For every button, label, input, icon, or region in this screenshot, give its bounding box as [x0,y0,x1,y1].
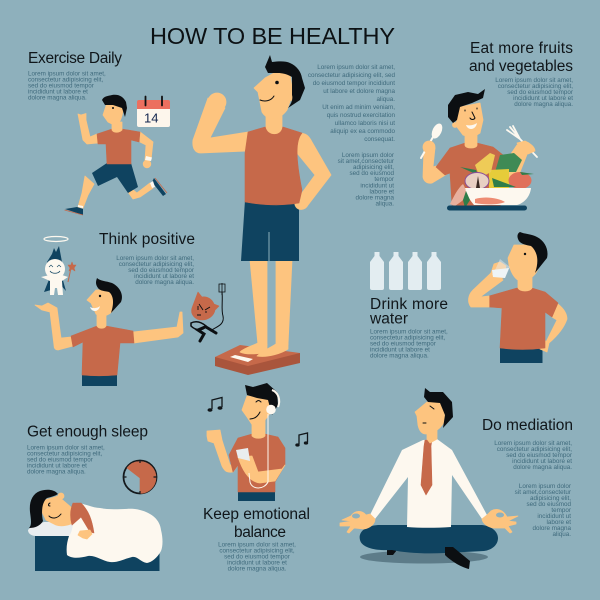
title: HOW TO BE HEALTHY [150,23,395,49]
devil icon [191,283,225,341]
text block: think positive: Lorem ipsum dolor sit amet, [116,255,194,262]
text block: central upper: aliquip ex ea commodo [330,128,395,135]
text block: central upper: ullamco laboris nisi ut [335,120,395,127]
text block: emotional: Lorem ipsum dolor sit amet, [218,542,296,548]
bathroom scale [215,345,300,375]
text block: eat: incididunt ut labore et [513,95,573,102]
music listening figure [207,383,285,501]
text block: mediation upper: dolore magna aliqua. [513,464,572,471]
heading: and vegetables: and vegetables [469,58,573,75]
heading: think positive: Think positive [99,231,195,248]
text block: mediation lower: sed do eiusmod [527,501,571,508]
heading: keep emotional: Keep emotional [203,506,310,523]
hand left [340,511,375,533]
heading: exercise daily: Exercise Daily [28,50,122,67]
text block: central upper: ut labore et dolore magna [323,88,395,95]
heading: eat more fruits: Eat more fruits [470,40,573,57]
panel: think positive [35,231,225,386]
text block: mediation upper: consectetur adipisicing elit, [497,446,572,453]
runner figure [64,95,167,215]
text block: eat: consectetur adipisicing elit, [498,83,573,90]
panel: do mediation [340,388,573,569]
heading: drink more: Drink more [370,296,448,313]
text block: eat: Lorem ipsum dolor sit amet, [495,77,573,84]
text block: mediation lower: adipisicing elit, [530,495,571,502]
text block: exercise: incididunt ut labore et [28,88,88,96]
text block: eat: sed do eiusmod tempor [507,89,573,96]
food bowl [447,153,534,210]
text block: sleep: incididunt ut labore et [27,462,87,470]
text block: central lower: sit amet,consectetur [338,158,394,165]
eating figure [421,89,537,210]
panel: eat more fruits and vegetables [421,40,573,210]
spoon [421,137,433,158]
text block: emotional: consectetur adipisicing elit, [219,548,295,554]
text block: central lower: aliqua. [375,200,394,208]
heading: do mediation: Do mediation [482,417,573,434]
main figure [193,55,331,356]
text block: mediation lower: tempor [551,507,571,514]
text block: exercise: dolore magna aliqua. [28,94,87,102]
text block: emotional: incididunt ut labore et [227,560,287,566]
icon: music notes right [295,433,308,447]
text block: mediation lower: dolore magna [532,525,571,532]
text block: think positive: consectetur adipisicing elit, [119,261,194,268]
text block: think positive: sed do eiusmod tempor [128,267,194,274]
meditating figure [340,388,518,569]
text block: emotional: dolore magna aliqua. [228,566,287,572]
text block: central upper: do eiusmod tempor incididunt [313,80,395,87]
panel: exercise daily [28,50,170,215]
text block: mediation upper: Lorem ipsum dolor sit amet, [494,440,572,447]
text block: central lower: incididunt ut [360,182,394,190]
text block: central lower: dolore magna [355,194,394,202]
text block: exercise: sed do eiusmod tempor [28,82,94,90]
text block: eat: dolore magna aliqua. [514,101,573,108]
text block: sleep: Lorem ipsum dolor sit amet, [27,444,105,452]
heading: water: water [369,310,408,328]
text block: mediation lower: aliqua. [552,531,571,538]
drinking figure [469,232,567,363]
text block: drink: consectetur adipisicing elit, [370,334,446,342]
icon: music notes left [208,398,222,412]
positive thinking figure [35,278,183,386]
text block: sleep: consectetur adipisicing elit, [27,450,103,458]
text block: emotional: sed do eiusmod tempor [224,554,290,560]
text block: exercise: Lorem ipsum dolor sit amet, [28,70,106,78]
text block: sleep: dolore magna aliqua. [27,468,86,476]
icon: clock [124,460,156,494]
icon: calendar [137,96,170,127]
sleeping figure [28,490,162,571]
text block: central upper: aliqua. [376,96,395,103]
panel: central man on scale [193,55,395,375]
text block: mediation lower: incididunt ut [537,513,571,520]
text block: think positive: incididunt ut labore et [134,273,194,280]
panel: drink more water [369,232,567,363]
text block: drink: Lorem ipsum dolor sit amet, [370,328,448,336]
heading: balance: balance [234,524,286,541]
text block: central upper: Lorem ipsum dolor sit amet, [317,64,395,71]
text block: mediation lower: Lorem ipsum dolor [519,483,571,490]
heading: get enough sleep: Get enough sleep [27,424,148,440]
text block: think positive: dolore magna aliqua. [135,279,194,286]
angel icon [41,236,76,295]
text block: central lower: labore et [369,188,394,196]
text block: drink: incididunt ut labore et [370,346,430,354]
text block: drink: sed do eiusmod tempor [370,340,436,348]
text block: drink: dolore magna aliqua. [370,352,429,360]
panel: keep emotional balance [203,383,310,572]
text block: exercise: consectetur adipisicing elit, [28,76,104,84]
hand right [482,509,518,533]
text block: central lower: adipisicing elit, [353,164,394,171]
text block: mediation upper: sed do eiusmod tempor [506,452,572,459]
text block: central upper: Ut enim ad minim veniam, [322,104,395,111]
text block: central upper: consectetur adipisicing elit, sed [308,72,395,79]
fork [507,126,537,157]
icon: water bottles [370,252,441,290]
text block: mediation lower: labore et [546,519,571,526]
text block: central lower: tempor [374,176,394,183]
text block: central lower: Lorem ipsum dolor [342,152,394,159]
text block: mediation lower: sit amet,consectetur [515,489,571,496]
text block: central upper: quis nostrud exercitation [327,112,395,119]
icon: calendar: 14 [144,110,158,126]
text block: mediation upper: incididunt ut labore et [512,458,572,465]
text block: central upper: consequat. [364,136,395,143]
text block: central lower: sed do eiusmod [350,170,394,177]
panel: get enough sleep [27,424,162,571]
text block: sleep: sed do eiusmod tempor [27,456,93,464]
